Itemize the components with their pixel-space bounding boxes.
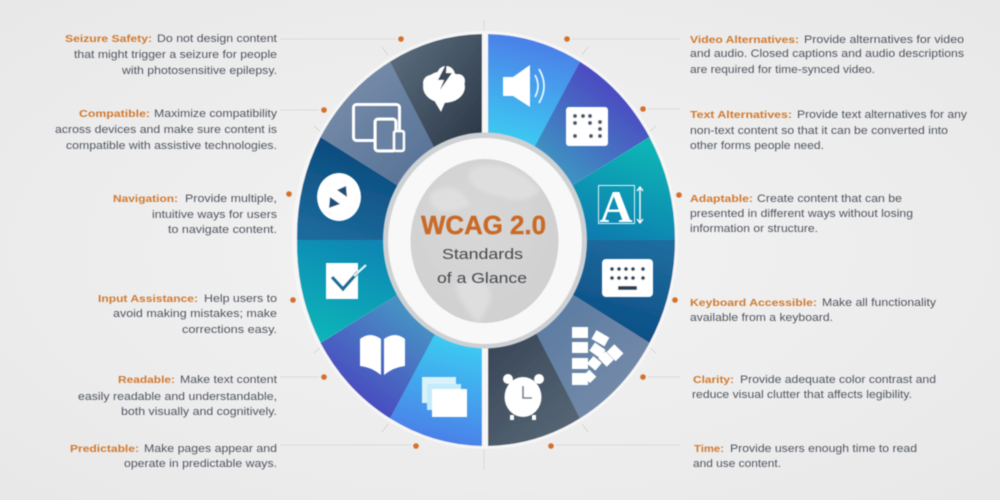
text: compatible: across devices and make sure content is: [55, 124, 278, 136]
text: navigation: Provide multiple,: [185, 193, 277, 205]
text: compatible: Compatible:: [79, 108, 150, 120]
text: navigation: to navigate content.: [168, 224, 277, 236]
text: predictable: [70, 443, 277, 470]
segment: input assistance: [297, 240, 485, 343]
text: text alternatives: non-text content so that it can be converted into: [690, 125, 948, 137]
icon: captions grid: [566, 107, 608, 146]
text: time: [693, 443, 917, 470]
text: navigation: intuitive ways for users: [152, 209, 278, 221]
centre title: [421, 210, 546, 287]
text: compatible: compatible with assistive technologies.: [66, 140, 277, 152]
text: keyboard accessible: available from a keyboard.: [690, 312, 833, 324]
text: text alternatives: other forms people need.: [690, 140, 824, 152]
text: video alternatives: are required for time-synced video.: [690, 64, 875, 76]
text: adaptable: [690, 193, 913, 235]
text: text alternatives: [690, 109, 968, 152]
icon: alarm clock: [503, 374, 544, 420]
text: predictable: Predictable:: [70, 443, 139, 455]
icon: speaker: [503, 65, 544, 107]
icon: brain with lightning: [423, 62, 465, 112]
segment: adaptable: [485, 137, 675, 240]
icon: checkbox: [326, 263, 366, 299]
icon: overlapping windows: [422, 377, 467, 417]
icon: open book: [360, 335, 405, 375]
text: time: Time:: [694, 443, 724, 455]
text: keyboard accessible: Keyboard Accessible:: [690, 297, 817, 309]
text: seizure safety: Do not design content: [157, 33, 277, 45]
text: adaptable: presented in different ways without losing: [690, 208, 913, 220]
text: compatible: [55, 108, 278, 152]
segment: video alternatives: [488, 34, 580, 240]
text: seizure safety: [65, 33, 277, 77]
centre badge: [383, 132, 587, 348]
segment: compatible: [320, 62, 485, 240]
text: adaptable: Create content that can be: [757, 193, 902, 205]
text: predictable: Make pages appear and: [144, 443, 277, 455]
segment: readable: [320, 240, 485, 418]
text: video alternatives: and audio. Closed captions and audio descriptions: [690, 48, 965, 60]
text: input assistance: Input Assistance:: [98, 293, 198, 305]
text: seizure safety: Seizure Safety:: [65, 33, 152, 45]
centre title: WCAG 2.0: [421, 210, 546, 240]
text: readable: easily readable and understandable,: [78, 391, 277, 403]
text: input assistance: corrections easy.: [182, 324, 277, 336]
text: predictable: operate in predictable ways.: [124, 458, 277, 470]
text: adaptable: information or structure.: [690, 223, 818, 235]
segment: predictable: [390, 240, 482, 446]
text: seizure safety: with photosensitive epilepsy.: [121, 65, 277, 77]
text: keyboard accessible: [690, 297, 937, 324]
text: time: Provide users enough time to read: [730, 443, 917, 455]
text: input assistance: [98, 293, 277, 336]
text: navigation: [113, 193, 278, 236]
text: readable: [78, 374, 277, 418]
text: adaptable: Adaptable:: [690, 193, 753, 205]
text: video alternatives: Provide alternatives for video: [804, 34, 964, 46]
icon: navigation compass: [317, 173, 361, 221]
segment: clarity: [485, 240, 650, 418]
text: clarity: reduce visual clutter that affects legibility.: [692, 389, 912, 401]
text: readable: both visually and cognitively.: [121, 406, 277, 418]
text: readable: Make text content: [180, 374, 277, 386]
text: video alternatives: [690, 34, 965, 76]
segment: keyboard accessible: [485, 240, 675, 343]
marker dots: [286, 36, 682, 449]
text: keyboard accessible: Make all functionality: [822, 297, 937, 309]
centre title: of a Glance: [437, 270, 527, 287]
text: readable: Readable:: [118, 374, 175, 386]
icon: resizable letter A: A: [599, 181, 633, 232]
text: clarity: Clarity:: [693, 374, 734, 386]
segment: navigation: [297, 137, 485, 240]
text: input assistance: Help users to: [204, 293, 277, 305]
text: clarity: [692, 374, 936, 401]
centre title: Standards: [442, 246, 523, 263]
text: seizure safety: that might trigger a seizure for people: [74, 49, 277, 61]
text: time: and use content.: [693, 458, 781, 470]
text: video alternatives: Video Alternatives:: [690, 34, 799, 46]
text: clarity: Provide adequate color contrast and: [740, 374, 936, 386]
text: compatible: Maximize compatibility: [154, 108, 278, 120]
icon: keyboard: [602, 259, 653, 297]
segment: text alternatives: [485, 62, 650, 240]
icon: colour swatches: [572, 327, 623, 385]
text: text alternatives: Provide text alternatives for any: [797, 109, 968, 121]
segment: seizure safety: [390, 34, 482, 240]
icon: responsive devices: [354, 104, 404, 151]
text: text alternatives: Text Alternatives:: [690, 109, 792, 121]
text: input assistance: avoid making mistakes; make: [113, 308, 277, 320]
wheel of twelve segments: [292, 31, 678, 449]
text: navigation: Navigation:: [113, 193, 178, 205]
segment: time: [488, 240, 580, 446]
